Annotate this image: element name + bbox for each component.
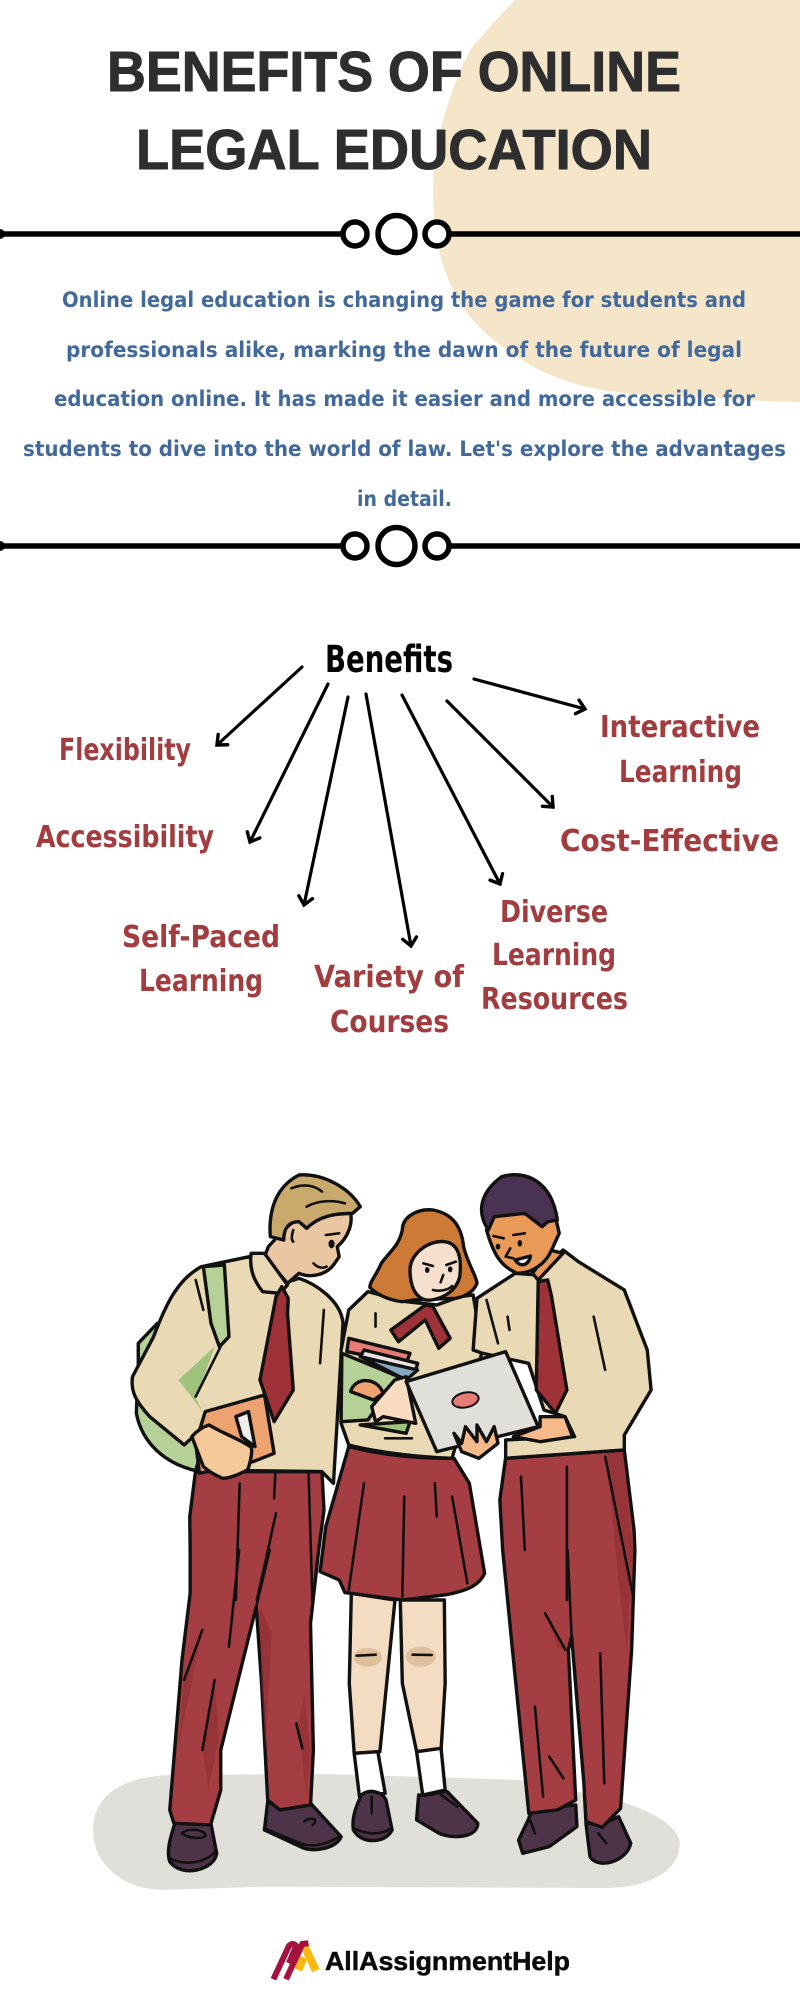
right boy tie [536,1280,567,1413]
logo [273,1943,316,1979]
title: LEGAL EDUCATION [136,118,652,182]
label: Diverse Learning Resources [481,895,628,1017]
label: Interactive Learning: Interactive [600,710,760,745]
illustration: lower bodies and shoes [168,1450,635,1871]
left boy hand [192,1425,252,1478]
backpack strap and gap behind arm [178,1265,229,1412]
intro paragraph [23,288,786,511]
illustration: three students upper bodies [132,1175,651,1600]
label: Diverse Learning Resources: Resources [481,982,628,1017]
label: Variety of Courses: Variety of [314,960,465,995]
stack of books and folder [341,1338,418,1433]
backpack [136,1323,215,1471]
label: Self-Paced Learning [122,920,280,999]
label: Variety of Courses: Courses [330,1005,449,1040]
girl legs [349,1593,445,1753]
label: Self-Paced Learning: Learning [139,964,263,999]
label: Diverse Learning Resources: Learning [492,938,616,973]
trouser and shoe creases [170,1550,606,1863]
right boy shirt [473,1250,651,1458]
girl shoes [353,1791,478,1841]
left boy neck and head [251,1175,360,1293]
girl hand [372,1377,416,1423]
right boy head [482,1175,563,1280]
left boy shirt [132,1257,343,1483]
bottom divider with circles [0,528,800,564]
benefits heading: Benefits [325,638,453,681]
label: Interactive Learning: Learning [619,755,742,790]
clothing creases [196,1280,634,1600]
left boy trousers [170,1472,324,1825]
trouser shading [178,1450,633,1797]
logo wordmark: AllAssignmentHelp [325,1946,570,1976]
top divider with circles [0,216,800,252]
orange book [196,1395,274,1473]
boys shoes [168,1802,631,1871]
intro paragraph: professionals alike, marking the dawn of the future of legal [66,338,742,362]
logo mark [273,1943,316,1979]
arrows from heading to benefits [217,667,585,946]
ground shadow [93,1774,680,1890]
intro paragraph: Online legal education is changing the game for students and [62,288,746,312]
label: Flexibility: Flexibility [59,733,191,768]
label: Accessibility: Accessibility [36,820,214,855]
girl socks [354,1748,445,1797]
left boy tie [260,1287,293,1422]
laptop [406,1352,538,1452]
right boy trousers [500,1450,635,1827]
intro paragraph: education online. It has made it easier and more accessible for [54,387,756,411]
intro paragraph: in detail. [357,487,452,511]
title: BENEFITS OF ONLINE [107,40,681,104]
label: Variety of Courses [314,960,465,1040]
hand under laptop [454,1425,498,1458]
girl shirt [341,1292,483,1458]
beige background blob [433,0,800,402]
label: Diverse Learning Resources: Diverse [500,895,608,930]
girl head [370,1210,477,1302]
right boy hand [513,1417,573,1442]
girl skirt [320,1447,485,1600]
girl ribbon [391,1305,450,1348]
label: Self-Paced Learning: Self-Paced [122,920,280,955]
title [107,40,681,182]
label: Cost-Effective: Cost-Effective [560,824,779,859]
label: Interactive Learning [600,710,760,790]
